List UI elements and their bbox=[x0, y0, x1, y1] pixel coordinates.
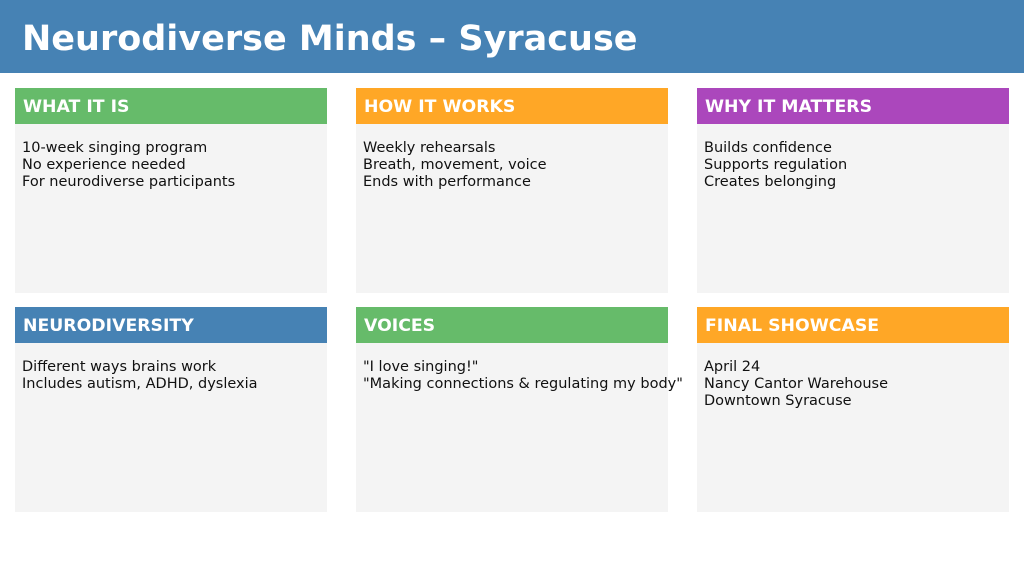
text: final showcase: April 24 bbox=[704, 359, 760, 375]
text: final showcase bbox=[704, 359, 888, 409]
panel: how it works bbox=[356, 88, 668, 293]
text: voices: "I love singing!" bbox=[363, 359, 478, 375]
text: neurodiversity bbox=[22, 359, 258, 392]
heading: why it matters bbox=[697, 88, 1009, 124]
panel: final showcase bbox=[697, 307, 1009, 512]
heading: neurodiversity: NEURODIVERSITY bbox=[23, 316, 194, 336]
title banner: Neurodiverse Minds – Syracuse bbox=[22, 19, 638, 59]
heading: how it works: HOW IT WORKS bbox=[364, 97, 515, 117]
text: why it matters: Builds confidence bbox=[704, 140, 832, 156]
text: why it matters: Creates belonging bbox=[704, 174, 836, 190]
text: why it matters: Supports regulation bbox=[704, 157, 847, 173]
panel: neurodiversity bbox=[15, 307, 327, 512]
heading: what it is: WHAT IT IS bbox=[23, 97, 129, 117]
heading: voices: VOICES bbox=[364, 316, 435, 336]
panel: what it is bbox=[15, 88, 327, 293]
text: what it is: 10-week singing program bbox=[22, 140, 207, 156]
text: what it is: No experience needed bbox=[22, 157, 186, 173]
heading: voices bbox=[356, 307, 668, 343]
text: neurodiversity: Different ways brains work bbox=[22, 359, 216, 375]
text: neurodiversity: Includes autism, ADHD, dyslexia bbox=[22, 376, 258, 392]
heading: why it matters: WHY IT MATTERS bbox=[705, 97, 872, 117]
text: what it is bbox=[22, 140, 235, 190]
text: what it is: For neurodiverse participants bbox=[22, 174, 235, 190]
text: final showcase: Downtown Syracuse bbox=[704, 393, 852, 409]
text: voices bbox=[363, 359, 683, 392]
heading: neurodiversity bbox=[15, 307, 327, 343]
heading: how it works bbox=[356, 88, 668, 124]
heading: final showcase: FINAL SHOWCASE bbox=[705, 316, 879, 336]
heading: what it is bbox=[15, 88, 327, 124]
panel: voices bbox=[356, 307, 668, 512]
text: how it works: Weekly rehearsals bbox=[363, 140, 496, 156]
text: how it works bbox=[363, 140, 547, 190]
text: how it works: Breath, movement, voice bbox=[363, 157, 547, 173]
title banner bbox=[0, 0, 1024, 73]
text: final showcase: Nancy Cantor Warehouse bbox=[704, 376, 888, 392]
text: why it matters bbox=[704, 140, 847, 190]
text: voices: "Making connections & regulating my body" bbox=[363, 376, 683, 392]
panel: why it matters bbox=[697, 88, 1009, 293]
heading: final showcase bbox=[697, 307, 1009, 343]
text: how it works: Ends with performance bbox=[363, 174, 531, 190]
